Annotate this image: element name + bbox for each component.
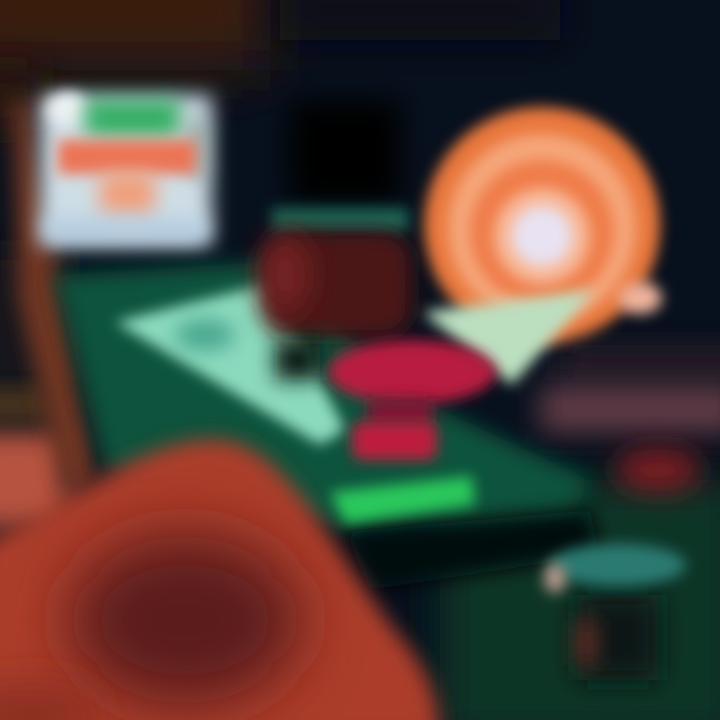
figure body [260, 232, 412, 337]
small chip stack [544, 544, 686, 680]
hand [0, 439, 440, 720]
red blob [614, 448, 702, 492]
crimson chips [328, 340, 496, 460]
chip wheel [424, 107, 662, 343]
dark shadow under figure [275, 340, 320, 380]
poster [40, 92, 212, 245]
green table [55, 262, 600, 590]
top hat [272, 100, 408, 232]
wooden post [12, 100, 95, 490]
bright green strip [330, 476, 475, 524]
pale green triangle [422, 290, 595, 385]
